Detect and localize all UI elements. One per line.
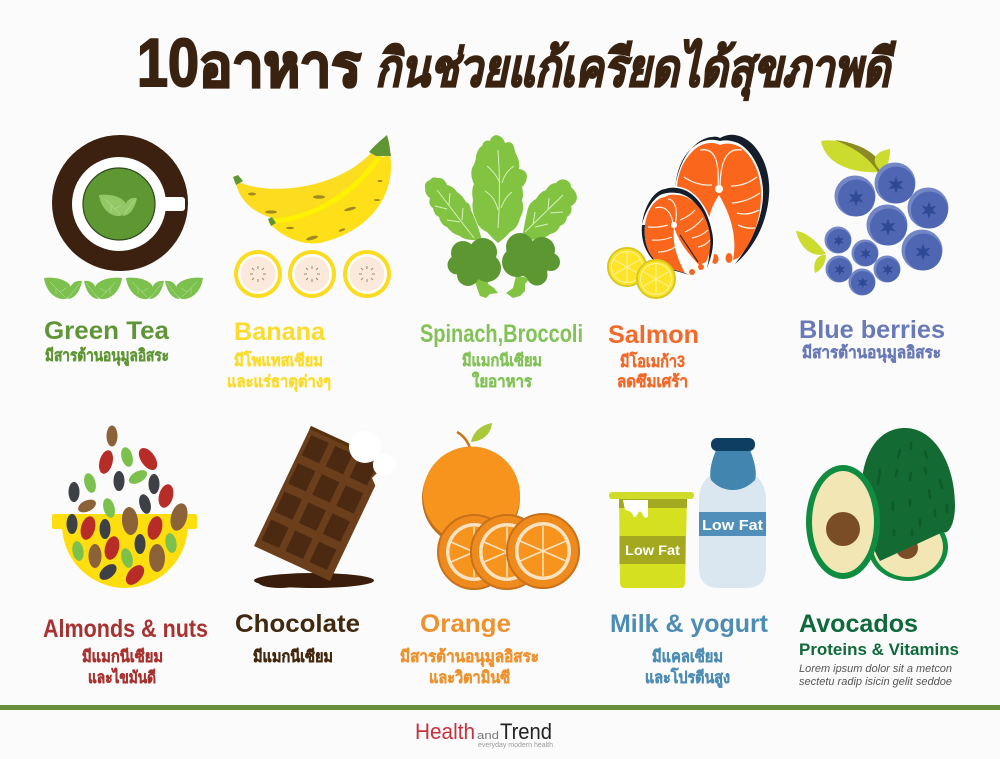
icon: bowl xyxy=(52,514,197,588)
heading: avocados: Avocados xyxy=(799,610,918,638)
icon: tea leaves row xyxy=(44,278,203,299)
heading: green tea: Green Tea xyxy=(44,317,170,345)
panel: banana xyxy=(227,135,391,392)
icon: milk bottle xyxy=(699,438,766,588)
icon: berry leaves xyxy=(796,140,890,273)
text: lorem ipsum: sectetu radip isicin gelit seddoe xyxy=(799,676,952,688)
title: อาหาร xyxy=(199,34,361,99)
heading: blue berries: Blue berries xyxy=(799,316,945,344)
text: banana benefit xyxy=(227,350,331,392)
icon: broccoli xyxy=(448,233,560,298)
icon: avocado front half xyxy=(806,465,880,579)
heading: orange: Orange xyxy=(420,610,511,638)
text: salmon benefit xyxy=(617,351,688,391)
text: lorem ipsum: Lorem ipsum dolor sit a metcon xyxy=(799,663,952,675)
icon: large salmon steak xyxy=(675,135,769,264)
logo: Health and Trend: Trend xyxy=(500,719,552,744)
panel: chocolate xyxy=(235,426,395,666)
panel: avocados xyxy=(799,428,959,688)
icon: yogurt cup: Low Fat xyxy=(625,542,680,558)
text: chocolate benefit: มีแมกนีเซียม xyxy=(253,647,333,666)
text: blueberries benefit: มีสารต้านอนุมูลอิสระ xyxy=(802,343,941,364)
logo: Health and Trend: and xyxy=(477,730,499,742)
heading: spinach and broccoli: Spinach,Broccoli xyxy=(420,320,583,348)
panel: milk and yogurt xyxy=(609,438,769,689)
panel: almonds and nuts xyxy=(43,426,208,687)
icon: green tea cup xyxy=(52,135,188,271)
text: spinach benefit xyxy=(462,351,542,391)
heading: chocolate: Chocolate xyxy=(235,610,360,638)
icon: whole avocado xyxy=(862,428,955,561)
icon: milk bottle: Low Fat xyxy=(702,517,763,534)
title: 10 xyxy=(137,25,199,101)
icon: avocado back half xyxy=(868,513,948,581)
icon: yogurt cup xyxy=(609,492,694,588)
text: banana benefit: และแร่ธาตุต่างๆ xyxy=(227,373,331,392)
text: lorem ipsum xyxy=(799,663,952,688)
icon: bananas xyxy=(233,135,391,243)
panel: orange xyxy=(400,423,579,687)
logo: Health and Trend xyxy=(415,719,553,749)
panel: green tea xyxy=(44,135,203,367)
heading: milk and yogurt: Milk & yogurt xyxy=(610,610,769,638)
icon: chocolate bar xyxy=(254,426,395,581)
heading: almonds and nuts: Almonds & nuts xyxy=(43,615,208,643)
text: green tea benefit: มีสารต้านอนุมูลอิสระ xyxy=(45,346,169,367)
panel: blueberries xyxy=(796,140,948,364)
title xyxy=(137,25,897,101)
text: orange benefit: มีสารต้านอนุมูลอิสระ xyxy=(400,647,539,668)
text: spinach benefit: ใยอาหาร xyxy=(472,371,532,391)
text: salmon benefit: ลดซึมเศร้า xyxy=(617,372,688,391)
text: milk benefit: และโปรตีนสูง xyxy=(645,667,730,689)
icon: mixed nuts xyxy=(66,426,190,588)
icon: orange slices xyxy=(438,514,579,589)
text: almonds benefit: มีแมกนีเซียม xyxy=(82,647,163,666)
title: กินช่วยแก้เครียดได้สุขภาพดี xyxy=(375,38,897,101)
text: salmon benefit: มีโอเมก้า3 xyxy=(620,351,685,371)
footer line xyxy=(0,705,1000,710)
text: spinach benefit: มีแมกนีเซียม xyxy=(462,351,542,370)
text: orange benefit: และวิตามินซี xyxy=(429,668,510,687)
text: almonds benefit: และไขมันดี xyxy=(88,667,156,687)
icon: chocolate shadow xyxy=(254,573,374,588)
icon: small salmon steak xyxy=(642,188,713,276)
logo: Health and Trend: everyday modern health xyxy=(478,742,553,749)
text: orange benefit xyxy=(400,647,539,687)
icon: spinach leaves xyxy=(425,135,577,243)
icon: banana slices xyxy=(234,250,391,298)
logo: Health and Trend: Health xyxy=(415,719,475,744)
icon: lemon slices xyxy=(608,248,675,298)
icon: whole orange xyxy=(422,423,520,547)
heading: banana: Banana xyxy=(234,318,326,346)
text: milk benefit: มีแคลเซียม xyxy=(652,647,723,666)
text: banana benefit: มีโพแทสเซียม xyxy=(234,350,323,370)
icon: blueberries xyxy=(824,162,948,296)
text: almonds benefit xyxy=(82,647,163,687)
panel: spinach and broccoli xyxy=(420,135,583,391)
text: milk benefit xyxy=(645,647,730,689)
subheading: proteins and vitamins: Proteins & Vitamins xyxy=(799,640,959,659)
panel: salmon xyxy=(608,135,769,391)
heading: salmon: Salmon xyxy=(608,321,699,349)
